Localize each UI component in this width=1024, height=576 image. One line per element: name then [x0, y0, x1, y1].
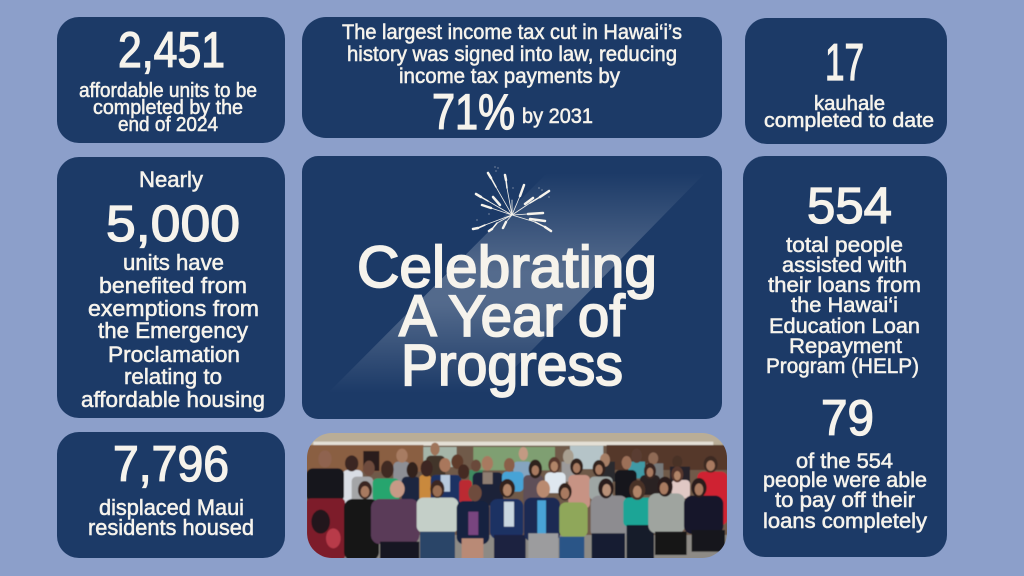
text: exemptions description: relating to	[124, 364, 222, 389]
title: Celebrating A Year of Progress: A Year of	[399, 284, 626, 349]
panel: Maui residents	[57, 432, 285, 558]
text: affordable units description	[79, 80, 257, 136]
text: HELP description: total people	[786, 234, 903, 257]
text: by 2031: by 2031	[522, 104, 593, 128]
text: paid off description: people were able	[763, 469, 927, 492]
text: paid off description: to pay off their	[775, 489, 915, 512]
icon: fireworks	[473, 167, 551, 231]
text: HELP description: Education Loan	[769, 315, 920, 338]
text: paid off description: of the 554	[796, 450, 893, 473]
text: kauhale description: completed to date	[764, 110, 934, 132]
stat: 5,000: 5,000	[106, 195, 240, 252]
title: Celebrating A Year of Progress	[357, 235, 657, 398]
text: kauhale description: kauhale	[814, 93, 885, 115]
text: kauhale description	[764, 93, 934, 132]
text: Maui residents description: displaced Maui	[99, 495, 244, 520]
text: income tax description: history was signed into law, reducing	[347, 42, 677, 66]
stat: 2,451: 2,451	[118, 22, 225, 78]
text: exemptions description: units have	[123, 250, 224, 275]
text: exemptions description: benefited from	[99, 273, 247, 298]
text: HELP description: assisted with	[782, 254, 907, 277]
stat: 79: 79	[821, 390, 874, 446]
text: paid off description: loans completely	[763, 510, 928, 533]
front row	[344, 499, 379, 561]
middle row	[343, 470, 363, 507]
panel: kauhale	[745, 18, 947, 144]
text: paid off description	[763, 450, 928, 533]
text: exemptions description: affordable housing	[81, 387, 265, 412]
light streak	[328, 173, 705, 393]
text: HELP description: Repayment	[789, 335, 902, 358]
panel: student loans	[743, 156, 947, 557]
title: Celebrating A Year of Progress: Celebrating	[357, 235, 657, 300]
panel: income tax cut	[302, 17, 722, 140]
text: exemptions description: exemptions from	[88, 296, 259, 321]
stat: 71%: 71%	[432, 84, 515, 140]
text: Maui residents description	[88, 495, 254, 540]
text: affordable units description: completed by the	[93, 97, 243, 119]
text: income tax description	[342, 20, 682, 88]
text: affordable units description: end of 2024	[118, 114, 218, 136]
title: Celebrating A Year of Progress: Progress	[401, 333, 623, 398]
text: exemptions description: the Emergency	[98, 318, 248, 343]
text: exemptions description: Proclamation	[108, 342, 240, 367]
stat: 554: 554	[807, 177, 892, 234]
text: HELP description: their loans from	[768, 274, 921, 297]
text: HELP description: the Hawai‘i	[791, 294, 898, 317]
left standing woman	[307, 468, 344, 502]
red dress woman	[697, 472, 727, 525]
text: income tax description: The largest income tax cut in Hawai‘i’s	[342, 20, 682, 44]
group photo	[300, 432, 735, 561]
text: Maui residents description: residents housed	[88, 515, 254, 540]
panel: celebrating title	[302, 156, 722, 419]
back row	[393, 462, 410, 485]
text: Nearly: Nearly	[139, 167, 203, 192]
stat: 17: 17	[825, 34, 864, 92]
text: income tax description: income tax payments by	[399, 64, 620, 88]
panel: affordable units	[57, 17, 285, 143]
text: HELP description: Program (HELP)	[766, 355, 919, 378]
stat: 7,796: 7,796	[113, 436, 229, 492]
text: HELP description	[766, 234, 921, 378]
text: exemptions description	[81, 250, 265, 412]
panel: exemptions	[57, 157, 285, 418]
text: affordable units description: affordable units to be	[79, 80, 257, 102]
